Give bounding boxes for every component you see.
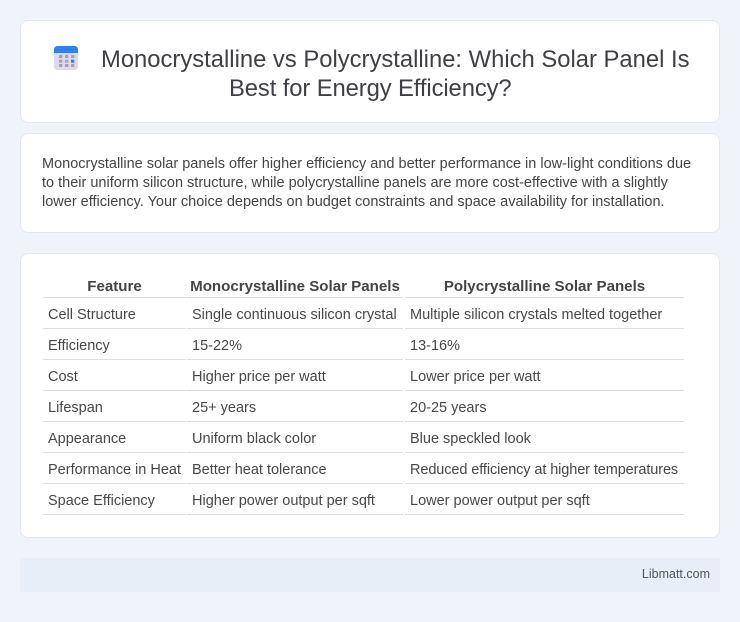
comparison table: Single continuous silicon crystal	[192, 307, 397, 323]
panel: title card	[20, 20, 720, 123]
comparison table: Lower price per watt	[410, 369, 541, 385]
summary text: lower efficiency. Your choice depends on budget constraints and space availability for installation.	[42, 194, 665, 210]
comparison table: Cell Structure	[48, 307, 136, 323]
panel: comparison table card	[20, 253, 720, 538]
comparison table: Polycrystalline Solar Panels	[444, 278, 645, 295]
comparison table	[43, 278, 684, 515]
comparison table: Blue speckled look	[410, 431, 531, 447]
comparison table: Lifespan	[48, 400, 103, 416]
comparison table: Space Efficiency	[48, 493, 155, 509]
summary text: to their uniform silicon structure, while polycrystalline panels are more cost-effective with a slightly	[42, 175, 668, 191]
summary text	[42, 156, 691, 210]
icon: calendar grid	[54, 46, 78, 70]
comparison table: Performance in Heat	[48, 462, 181, 478]
comparison table: Reduced efficiency at higher temperatures	[410, 462, 678, 478]
footer credit: Libmatt.com	[642, 567, 710, 581]
comparison table: Multiple silicon crystals melted together	[410, 307, 662, 323]
comparison table: Higher price per watt	[192, 369, 326, 385]
title: Best for Energy Efficiency?	[229, 75, 512, 102]
comparison table: Feature	[87, 278, 142, 295]
comparison table: Higher power output per sqft	[192, 493, 375, 509]
comparison table: Uniform black color	[192, 431, 316, 447]
comparison table: Monocrystalline Solar Panels	[190, 278, 400, 295]
comparison table: 25+ years	[192, 400, 256, 416]
panel: summary card	[20, 133, 720, 233]
comparison table: Appearance	[48, 431, 126, 447]
comparison table: Cost	[48, 369, 78, 385]
title: Monocrystalline vs Polycrystalline: Which Solar Panel Is	[101, 46, 690, 73]
comparison table: Efficiency	[48, 338, 110, 354]
title	[101, 46, 690, 102]
footer bar	[20, 558, 720, 592]
comparison table: Better heat tolerance	[192, 462, 327, 478]
comparison table: 15-22%	[192, 338, 242, 354]
comparison table: 20-25 years	[410, 400, 487, 416]
comparison table: 13-16%	[410, 338, 460, 354]
summary text: Monocrystalline solar panels offer higher efficiency and better performance in low-light conditions due	[42, 156, 691, 172]
comparison table: Lower power output per sqft	[410, 493, 590, 509]
